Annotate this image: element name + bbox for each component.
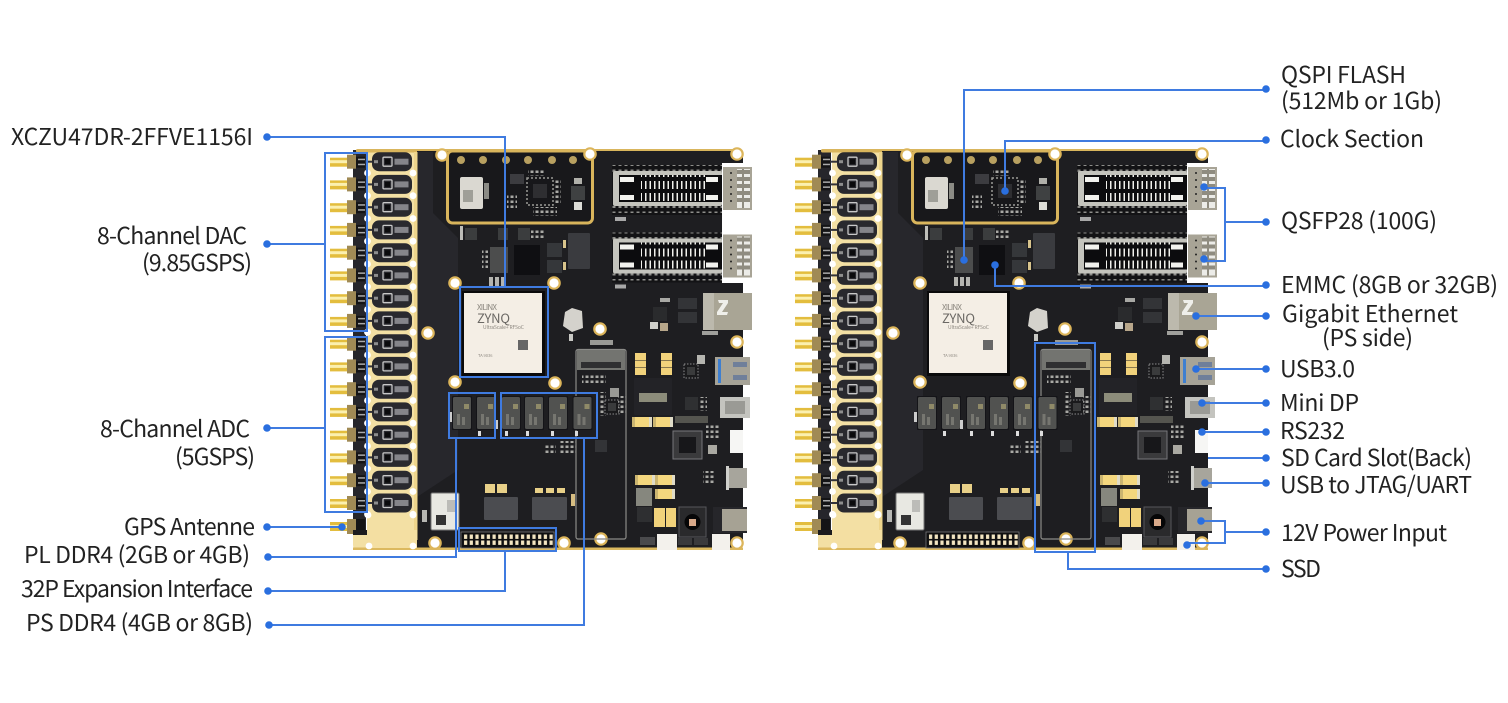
label: dac rate: (9.85GSPS) — [142, 244, 252, 278]
ethernet leader — [1196, 315, 1266, 317]
clock section frame — [448, 151, 592, 223]
label: ssd: SSD — [1281, 550, 1321, 584]
label: usb3: USB3.0 — [1280, 350, 1355, 384]
label: clock: Clock Section — [1280, 120, 1424, 154]
small silver part — [563, 308, 613, 345]
expansion header — [461, 532, 554, 548]
fpga callout — [267, 137, 548, 377]
mini dp leader — [1202, 402, 1266, 404]
label: adc: 8-Channel ADC — [100, 410, 250, 444]
clock leader — [1005, 141, 1266, 191]
ssd callout — [1035, 343, 1266, 569]
label: gps: GPS Antenne — [124, 508, 255, 542]
gold outline top — [356, 149, 740, 152]
bottom channel rows and antenna — [330, 494, 416, 549]
dac callout — [267, 153, 367, 331]
chip marking: right fpga: XILINX — [942, 302, 962, 313]
chip marking: right fpga — [929, 293, 1007, 373]
usb3 leader — [1196, 368, 1266, 370]
channel rows — [330, 152, 416, 495]
chip marking: left fpga: ZYNQ — [477, 308, 510, 327]
chip marking: right fpga: TA 9036 — [943, 353, 958, 359]
expansion callout — [268, 528, 556, 591]
chip marking: right fpga: ZYNQ — [942, 308, 975, 327]
left board photograph — [330, 147, 752, 550]
right leaders — [964, 90, 1266, 569]
left labels — [11, 118, 255, 638]
main pcb — [417, 151, 743, 548]
label: fpga: XCZU47DR-2FFVE1156I — [11, 118, 253, 152]
chip marking: left fpga: UltraScale+ RFSoC — [483, 324, 524, 331]
ps ddr callout — [269, 393, 597, 625]
pl ddr callout — [268, 393, 495, 557]
label: ethernet side: (PS side) — [1322, 319, 1413, 353]
rs232 leader — [1202, 431, 1266, 433]
right labels — [1280, 56, 1498, 584]
label: dac: 8-Channel DAC — [97, 217, 247, 251]
qsfp cages — [612, 165, 752, 288]
rear connectors — [713, 357, 750, 533]
gold outline bottom — [353, 548, 743, 550]
label: qspi: QSPI FLASH — [1281, 56, 1406, 90]
power leader — [1187, 521, 1266, 543]
right leader dots — [960, 85, 1270, 573]
mounting holes — [421, 147, 744, 550]
left callout boxes and leaders — [267, 137, 597, 625]
label: mini dp: Mini DP — [1280, 384, 1359, 418]
gold bottom block — [367, 530, 417, 548]
gold RF strip — [353, 150, 420, 550]
power section — [544, 353, 730, 550]
ddr memory chips — [449, 396, 592, 436]
label: sd card: SD Card Slot(Back) — [1281, 439, 1472, 473]
middle section chips — [460, 226, 590, 286]
chip marking: left fpga: TA 9036 — [478, 353, 493, 359]
label: ps ddr: PS DDR4 (4GB or 8GB) — [26, 604, 253, 638]
chip marking: right fpga: UltraScale+ RFSoC — [948, 324, 989, 331]
label: ethernet: Gigabit Ethernet — [1282, 295, 1458, 329]
gps module — [422, 493, 459, 530]
label: expansion: 32P Expansion Interface — [21, 570, 253, 604]
m.2 ssd slot — [576, 350, 626, 539]
qspi leader — [964, 90, 1266, 260]
chip marking: left fpga — [464, 293, 542, 373]
emmc leader — [995, 265, 1266, 286]
jtag leader — [1205, 482, 1266, 484]
label: power: 12V Power Input — [1281, 514, 1447, 548]
ethernet jack and phy — [650, 293, 752, 335]
gold strip side rail — [414, 152, 418, 540]
right board photograph — [795, 147, 1217, 550]
clock section parts — [457, 156, 585, 216]
label: qspi size: (512Mb or 1Gb) — [1281, 82, 1442, 116]
left leader dots — [263, 133, 346, 629]
label: pl ddr: PL DDR4 (2GB or 4GB) — [24, 536, 250, 570]
power inductors — [484, 484, 575, 520]
label: jtag: USB to JTAG/UART — [1280, 466, 1472, 500]
label: adc rate: (5GSPS) — [175, 438, 255, 472]
gps leader — [267, 526, 342, 528]
label: emmc: EMMC (8GB or 32GB) — [1281, 266, 1498, 300]
qsfp leader — [1204, 188, 1266, 261]
pcb shaded plane — [417, 152, 458, 497]
label: rs232: RS232 — [1280, 412, 1345, 446]
sd leader — [1208, 457, 1266, 459]
adc callout — [267, 337, 367, 512]
fpga package shadow — [462, 291, 545, 376]
chip marking: left fpga: XILINX — [477, 302, 497, 313]
label: qsfp: QSFP28 (100G) — [1281, 202, 1437, 236]
connector strip — [353, 150, 366, 530]
